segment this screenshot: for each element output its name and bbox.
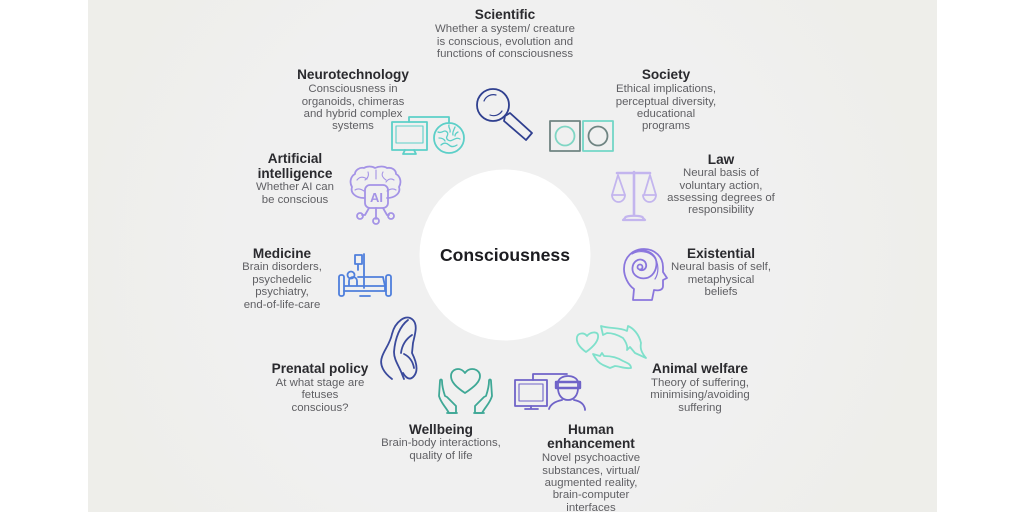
text: Animal welfare: minimising/avoiding (650, 389, 750, 401)
text: Law: responsibility (688, 204, 754, 216)
text: Artificial intelligence: be conscious (262, 194, 329, 206)
text: Artificial intelligence: Whether AI can (256, 181, 334, 193)
text: Existential: beliefs (705, 286, 738, 298)
text: Human enhancement: Human (568, 422, 614, 437)
text: Human enhancement: substances, virtual/ (542, 465, 641, 477)
text: Human enhancement: augmented reality, (545, 477, 637, 489)
text: Law: Neural basis of (683, 167, 760, 179)
text: Human enhancement: enhancement (547, 436, 635, 451)
text: Animal welfare: suffering (678, 402, 722, 414)
text: Neurotechnology: Neurotechnology (297, 67, 409, 82)
text: Prenatal policy: At what stage are (276, 377, 364, 389)
text: Wellbeing: Brain-body interactions, (381, 437, 501, 449)
text: Law: voluntary action, (680, 180, 762, 192)
text: Scientific (435, 7, 575, 60)
text: Medicine (242, 246, 322, 311)
text: Medicine: end-of-life-care (244, 299, 320, 311)
text: Existential: Neural basis of self, (671, 261, 771, 273)
text: Scientific: functions of consciousness (437, 48, 573, 60)
text: Society: educational (637, 108, 695, 120)
text: Law: Law (708, 152, 735, 167)
text: Existential: metaphysical (688, 274, 754, 286)
text: Existential (671, 246, 771, 298)
text: Medicine: psychiatry, (255, 286, 309, 298)
icon: hands holding heart (439, 369, 492, 413)
central circle (420, 170, 590, 340)
icon: AI brain: AI (370, 190, 383, 205)
text: Animal welfare: Animal welfare (652, 361, 748, 376)
text: Prenatal policy: fetuses (302, 389, 339, 401)
icon: scales (612, 172, 656, 220)
text: Medicine: Brain disorders, (242, 261, 322, 273)
text: Medicine: psychedelic (252, 274, 312, 286)
icon: AI brain (351, 166, 400, 224)
text: Human enhancement: Novel psychoactive (542, 452, 640, 464)
icon: person in VR headset with monitor (515, 374, 585, 410)
text: Artificial intelligence: intelligence (258, 166, 333, 181)
text: Law: assessing degrees of (667, 192, 776, 204)
text: Wellbeing: quality of life (409, 450, 473, 462)
text: Prenatal policy: conscious? (292, 402, 348, 414)
text: Wellbeing: Wellbeing (409, 422, 473, 437)
icon: head with spiral (624, 249, 667, 300)
text: Neurotechnology (297, 67, 409, 132)
text: Prenatal policy: Prenatal policy (272, 361, 369, 376)
text: Artificial intelligence: Artificial (268, 151, 322, 166)
text: Animal welfare: Theory of suffering, (651, 377, 749, 389)
text: Animal welfare (650, 361, 750, 414)
text: Wellbeing (381, 422, 501, 462)
icon: hospital bed (339, 254, 391, 296)
central circle: Consciousness (440, 245, 570, 265)
text: Neurotechnology: Consciousness in (308, 83, 398, 95)
text: Society: Ethical implications, (616, 83, 716, 95)
icon: monitor and brain (392, 117, 464, 154)
text: Society: perceptual diversity, (616, 96, 716, 108)
icon: two squares with circles (550, 121, 613, 151)
text: Scientific: Whether a system/ creature (435, 23, 575, 35)
text: Scientific: Scientific (475, 7, 536, 22)
text: Law (667, 152, 776, 216)
text: Medicine: Medicine (253, 246, 312, 261)
icon: pregnant woman (381, 318, 417, 379)
icon: magnifying glass (477, 89, 532, 140)
text: Prenatal policy (272, 361, 369, 414)
text: Human enhancement (542, 422, 641, 512)
text: Society: Society (642, 67, 691, 82)
text: Society: programs (642, 120, 690, 132)
text: Society (616, 67, 716, 132)
text: Neurotechnology: and hybrid complex (304, 108, 403, 120)
text: Human enhancement: brain-computer (553, 489, 630, 501)
text: Scientific: is conscious, evolution and (437, 36, 573, 48)
text: Existential: Existential (687, 246, 755, 261)
text: Artificial intelligence (256, 151, 334, 206)
text: Neurotechnology: systems (332, 120, 374, 132)
text: Neurotechnology: organoids, chimeras (302, 96, 405, 108)
icon: heart, dolphin, caterpillar (577, 326, 646, 368)
